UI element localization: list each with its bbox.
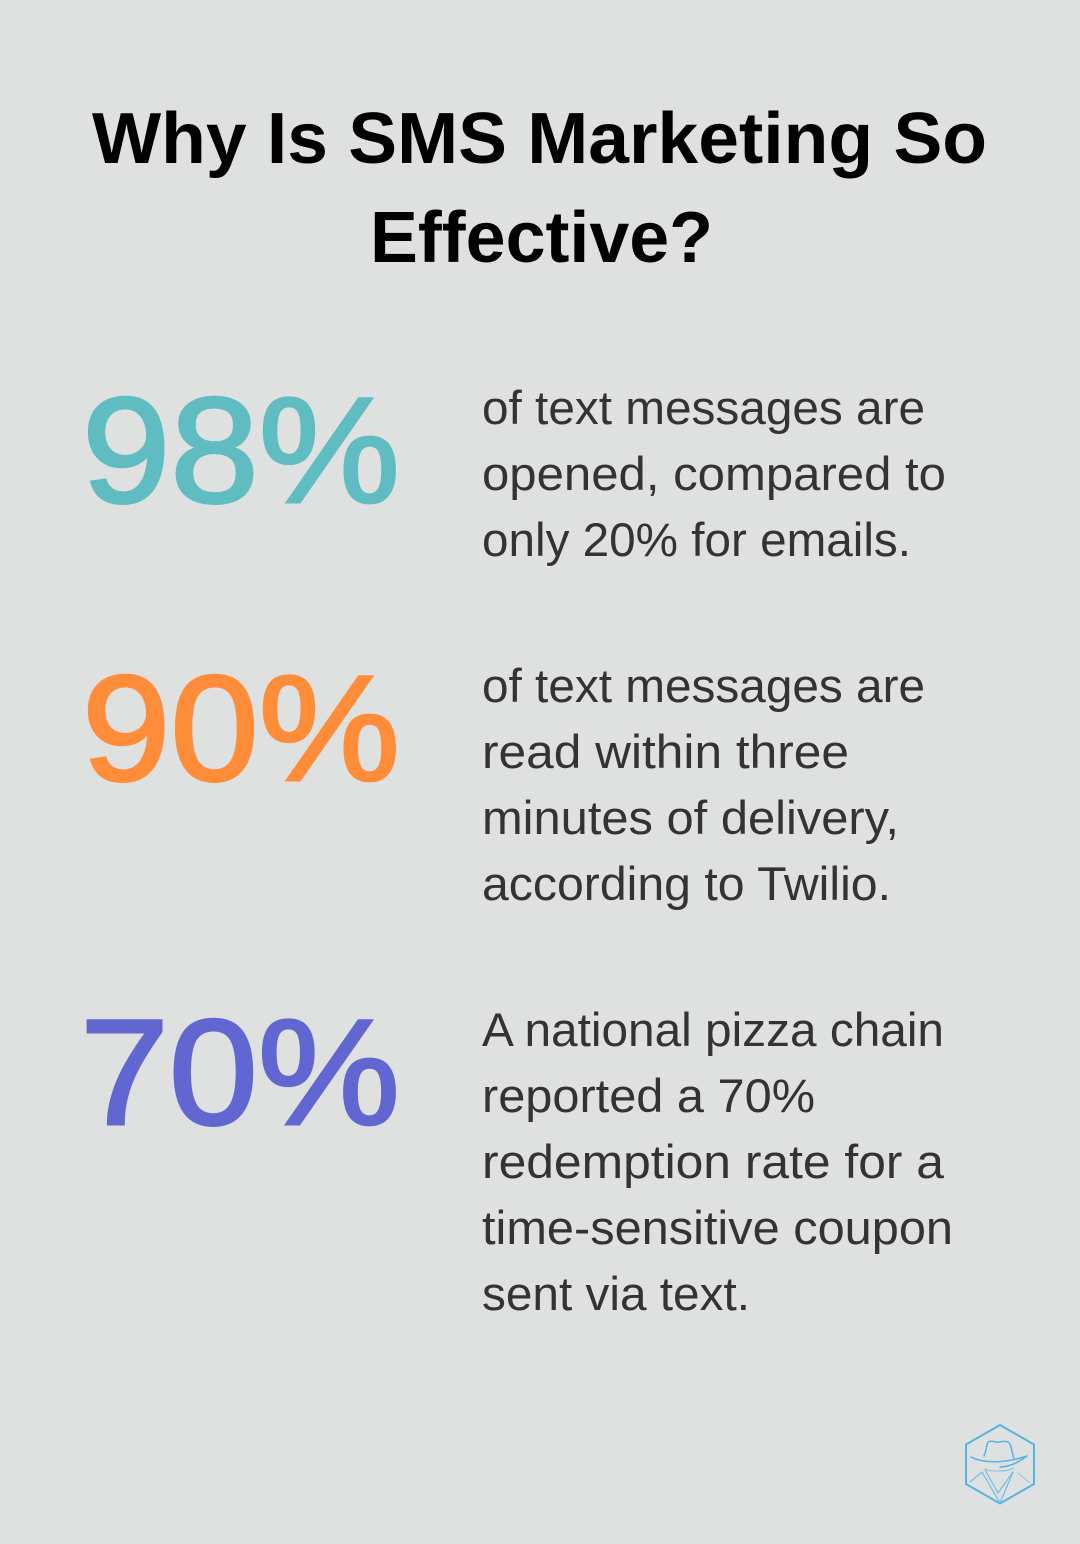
text: 90% description: minutes of delivery, — [482, 791, 899, 844]
text: 70% description: sent via text. — [482, 1267, 750, 1320]
stat: 98% — [82, 366, 946, 566]
text: 70% description: time-sensitive coupon — [482, 1201, 953, 1254]
text: 70% description: reported a 70% — [482, 1069, 815, 1122]
stat: 70% — [80, 988, 953, 1320]
text: 90% description — [482, 659, 925, 910]
text: 90% description: read within three — [482, 725, 849, 778]
icon: logo hexagon with hat and coat — [966, 1425, 1034, 1504]
text: 90% description: according to Twilio. — [482, 857, 891, 910]
number: 98%: 98% — [82, 366, 400, 534]
text: 98% description: only 20% for emails. — [482, 513, 911, 566]
text: 70% description — [482, 1003, 953, 1320]
title: Effective? — [370, 198, 713, 278]
title: Why Is SMS Marketing So — [92, 99, 987, 179]
text: 98% description: of text messages are — [482, 381, 925, 434]
text: 70% description: A national pizza chain — [482, 1003, 944, 1056]
text: 98% description: opened, compared to — [482, 447, 946, 500]
text: 90% description: of text messages are — [482, 659, 925, 712]
stat: 90% — [82, 644, 925, 910]
title — [92, 99, 987, 278]
text: 98% description — [482, 381, 946, 566]
number: 70%: 70% — [80, 988, 400, 1156]
text: 70% description: redemption rate for a — [482, 1135, 945, 1188]
number: 90%: 90% — [82, 644, 400, 812]
